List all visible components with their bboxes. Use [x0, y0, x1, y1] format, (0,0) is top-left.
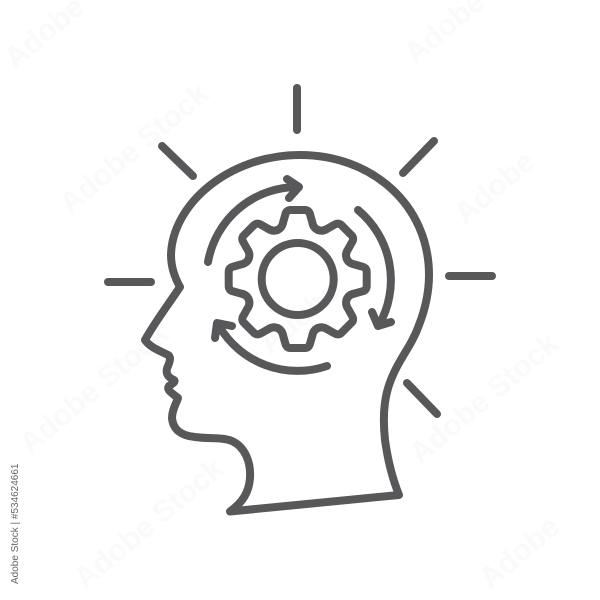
icon: head with gear — [108, 88, 492, 512]
arrow: bottom clockwise — [215, 323, 327, 371]
ray: upper left — [162, 146, 193, 176]
watermark pattern: Adobe Stock — [53, 77, 215, 220]
watermark pattern: Adobe Stock — [403, 327, 565, 470]
watermark pattern: Adobe — [473, 510, 566, 595]
arrow: right clockwise — [358, 210, 391, 326]
watermark pattern: Adobe Stock — [13, 317, 175, 460]
stock id label: Adobe Stock | #534624661 — [10, 463, 21, 584]
arrow: top clockwise — [208, 179, 299, 262]
watermark pattern: Adobe — [448, 145, 541, 230]
ray: left — [108, 278, 151, 286]
watermark pattern: Adobe — [253, 275, 346, 360]
watermark pattern: Adobe Stock — [68, 452, 230, 595]
ray: right — [449, 272, 492, 280]
ray: top — [293, 88, 301, 130]
ray: lower right — [407, 383, 437, 414]
head outline — [145, 155, 429, 512]
ray: upper right — [403, 141, 434, 173]
gear — [229, 210, 367, 348]
